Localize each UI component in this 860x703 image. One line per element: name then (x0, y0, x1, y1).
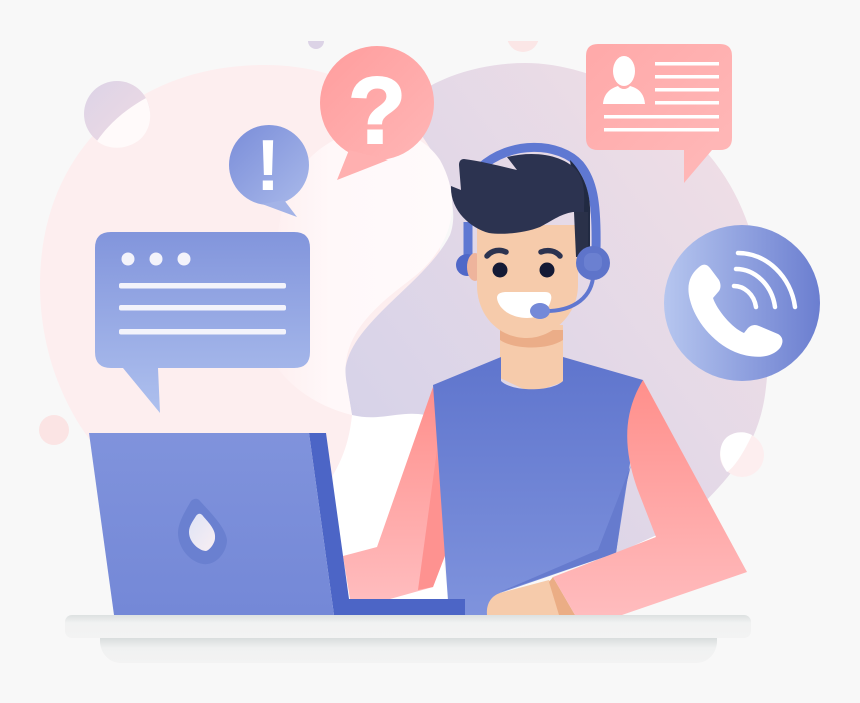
wrist cuff (549, 577, 575, 615)
signal arcs (734, 253, 795, 307)
background blob: pink (40, 65, 440, 480)
smile (497, 292, 551, 318)
speech bubble: question (320, 46, 434, 180)
microphone (530, 303, 550, 319)
eyes (492, 262, 554, 278)
face (477, 225, 578, 338)
left ear (467, 253, 483, 281)
illustration: support agent (39, 41, 820, 648)
question mark: ? (348, 58, 406, 164)
laptop lid (89, 433, 334, 615)
exclamation mark: ! (256, 126, 280, 206)
phone handset (688, 265, 782, 357)
speech bubble: exclamation (229, 125, 309, 217)
left sleeve fold (418, 450, 446, 590)
dark hair side (570, 160, 590, 257)
white gap under arm (617, 537, 656, 555)
card lines (604, 62, 719, 132)
decorative circles: top (308, 41, 538, 52)
decorative circle: left (39, 415, 69, 445)
desk top (65, 615, 751, 638)
microphone boom (543, 278, 593, 311)
message lines (119, 283, 286, 334)
eyebrows (487, 250, 560, 256)
desk (65, 615, 751, 663)
desk lower shelf (100, 638, 717, 663)
icon: phone call (664, 225, 820, 381)
agent (343, 147, 747, 615)
left sleeve (343, 387, 446, 599)
speech bubble: contact card (586, 44, 732, 183)
white area behind agent (333, 414, 450, 612)
hair (451, 154, 584, 234)
dark hair strand (574, 212, 588, 257)
left ear cup (456, 254, 478, 276)
decorative circle: right (720, 432, 764, 477)
message dots (122, 252, 190, 266)
torso side shade (500, 465, 631, 592)
hand (487, 580, 575, 615)
neck (500, 325, 563, 393)
laptop base and hinge (309, 433, 465, 615)
neck shadow (500, 330, 563, 348)
background blob: lavender (345, 63, 768, 570)
torso (433, 357, 643, 615)
background swirl: pale (265, 129, 452, 415)
decorative circle: top left (84, 81, 150, 148)
speech bubble: message (95, 232, 310, 413)
laptop logo (178, 499, 227, 564)
right sleeve (553, 380, 747, 615)
headband (468, 147, 596, 268)
right ear cup (576, 246, 610, 280)
avatar icon (603, 56, 645, 104)
laptop (89, 433, 465, 615)
